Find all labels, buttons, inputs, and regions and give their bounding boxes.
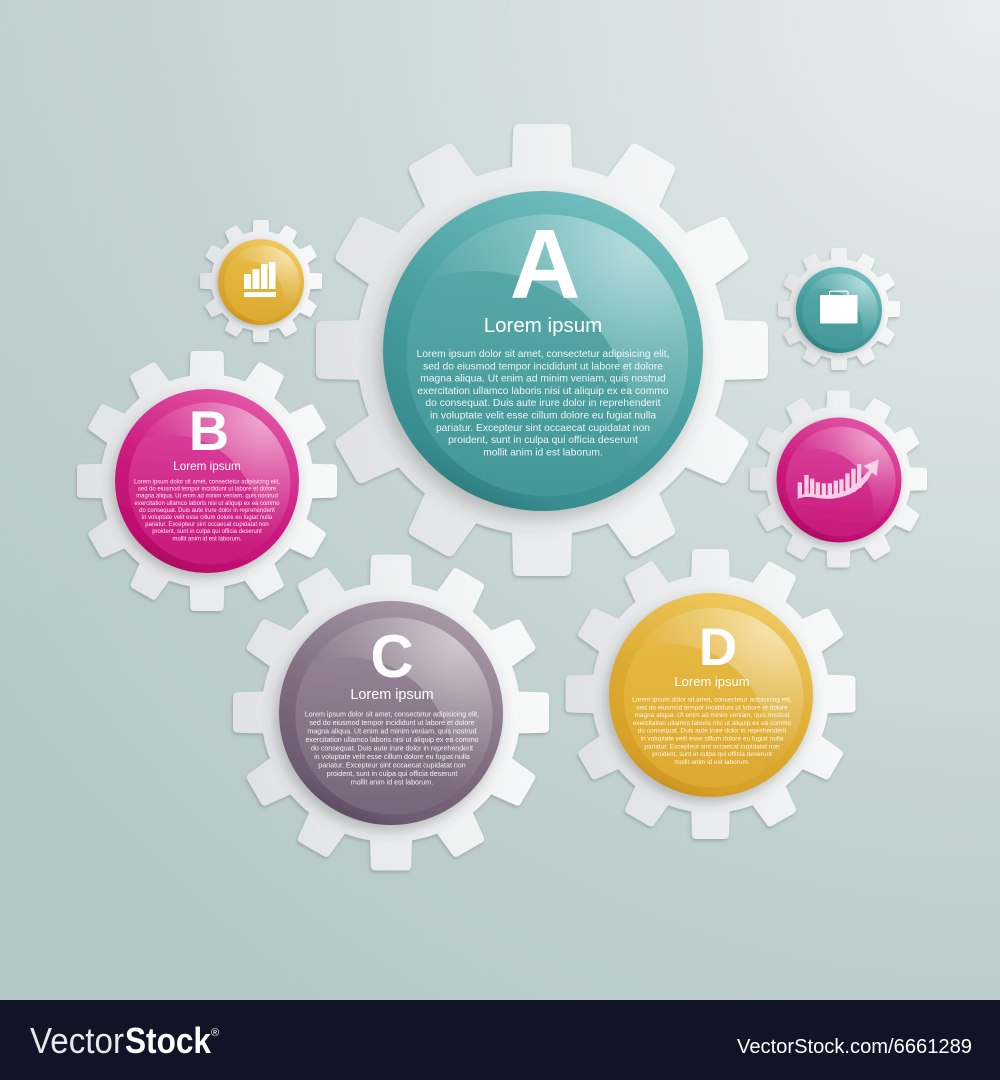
panel: gear A bbox=[311, 119, 773, 581]
body text C: in voluptate velit esse cillum dolore eu fugiat nulla bbox=[314, 753, 470, 761]
heading B: Lorem ipsum bbox=[173, 460, 241, 473]
gear shape bbox=[74, 348, 340, 614]
yellow button bbox=[214, 238, 306, 330]
body text D: magna aliqua. Ut enim ad minim veniam, quis nostrud bbox=[634, 712, 790, 719]
body text C: mollit anim id est laborum. bbox=[351, 778, 433, 786]
body text D: in voluptate velit esse cillum dolore eu fugiat nulla bbox=[641, 736, 784, 742]
footer logo: Vector bbox=[30, 1020, 124, 1061]
heading D: Lorem ipsum bbox=[674, 674, 750, 689]
teal button bbox=[368, 188, 710, 530]
body text C bbox=[305, 710, 479, 786]
footer bar bbox=[0, 1000, 1000, 1080]
panel: gear D bbox=[563, 546, 858, 842]
pink button bbox=[770, 416, 904, 550]
body text A: proident, sunt in culpa qui officia deserunt bbox=[448, 435, 638, 446]
purple button bbox=[268, 599, 508, 838]
body text D: exercitation ullamco laboris nisi ut aliquip ex ea commo bbox=[633, 720, 792, 727]
body text A: in voluptate velit esse cillum dolore eu fugiat nulla bbox=[430, 410, 656, 422]
teal button bbox=[792, 266, 884, 358]
heading A: Lorem ipsum bbox=[484, 314, 602, 337]
body text B: exercitation ullamco laboris nisi ut aliquip ex ea commo bbox=[135, 501, 280, 507]
small gear: bar chart bbox=[199, 219, 323, 343]
body text B: proident, sunt in culpa qui officia deserunt bbox=[152, 529, 262, 535]
body text A: pariatur. Excepteur sint occaecat cupidatat non bbox=[436, 423, 650, 434]
body text B: mollit anim id est laborum. bbox=[173, 536, 242, 542]
gear shape bbox=[311, 119, 773, 581]
body text D: sed do eiusmod tempor incididunt ut labore et dolore bbox=[636, 704, 788, 711]
body text B bbox=[134, 480, 280, 542]
yellow button bbox=[599, 591, 817, 809]
panel: gear C bbox=[230, 551, 552, 874]
panel: gear B bbox=[74, 348, 340, 614]
body text A: do consequat. Duis aute irure dolor in reprehenderit bbox=[425, 398, 661, 409]
heading C: Lorem ipsum bbox=[350, 687, 434, 703]
body text B: magna aliqua. Ut enim ad minim veniam, quis nostrud bbox=[136, 494, 278, 500]
letter B: B bbox=[189, 399, 229, 462]
footer logo bbox=[30, 1020, 219, 1061]
body text B: Lorem ipsum dolor sit amet, consectetur adipisicing elit, bbox=[134, 480, 280, 486]
body text D: proident, sunt in culpa qui officia deserunt bbox=[652, 751, 772, 758]
body text D: pariatur. Excepteur sint occaecat cupidatat non bbox=[644, 743, 780, 750]
body text C: proident, sunt in culpa qui officia deserunt bbox=[327, 770, 457, 778]
body text C: pariatur. Excepteur sint occaecat cupidatat non bbox=[318, 762, 466, 770]
gear shape bbox=[199, 219, 323, 343]
body text D bbox=[632, 696, 792, 766]
small gear: growth chart bbox=[748, 389, 929, 569]
footer logo: ® bbox=[211, 1027, 219, 1039]
body text D: Lorem ipsum dolor sit amet, consectetur adipisicing elit, bbox=[632, 696, 792, 704]
gear shape bbox=[777, 247, 901, 371]
icon: briefcase bbox=[820, 291, 858, 324]
gear shape bbox=[563, 546, 858, 842]
body text A: mollit anim id est laborum. bbox=[483, 447, 603, 458]
icon: rising bars with arrow bbox=[797, 459, 879, 499]
pink button bbox=[106, 388, 303, 584]
body text C: exercitation ullamco laboris nisi ut aliquip ex ea commo bbox=[305, 736, 479, 744]
letter D: D bbox=[699, 618, 737, 677]
body text D: do consequat. Duis aute irure dolor in reprehenderit bbox=[638, 728, 786, 735]
gear shape bbox=[230, 551, 552, 874]
body text A bbox=[417, 349, 669, 458]
body text B: sed do eiusmod tempor incididunt ut labore et dolore bbox=[138, 487, 277, 493]
small gear: briefcase bbox=[777, 247, 901, 371]
letter C: C bbox=[370, 623, 414, 690]
body text D: mollit anim id est laborum. bbox=[674, 759, 750, 766]
letter A: A bbox=[510, 209, 580, 319]
body text A: sed do eiusmod tempor incididunt ut labore et dolore bbox=[423, 361, 663, 372]
body text B: pariatur. Excepteur sint occaecat cupidatat non bbox=[145, 522, 269, 528]
footer logo: Stock bbox=[125, 1020, 212, 1061]
body text B: do consequat. Duis aute irure dolor in reprehenderit bbox=[139, 508, 275, 514]
body text C: magna aliqua. Ut enim ad minim veniam, quis nostrud bbox=[307, 728, 477, 736]
body text A: magna aliqua. Ut enim ad minim veniam, quis nostrud bbox=[420, 374, 666, 385]
icon: bar chart bbox=[244, 262, 276, 297]
body text C: Lorem ipsum dolor sit amet, consectetur adipisicing elit, bbox=[305, 710, 479, 718]
body text A: exercitation ullamco laboris nisi ut aliquip ex ea commo bbox=[417, 386, 669, 397]
body text B: in voluptate velit esse cillum dolore eu fugiat nulla bbox=[142, 515, 273, 521]
body text A: Lorem ipsum dolor sit amet, consectetur adipisicing elit, bbox=[417, 349, 669, 360]
footer url: VectorStock.com/6661289 bbox=[737, 1036, 972, 1058]
gear shape bbox=[748, 389, 929, 569]
body text C: do consequat. Duis aute irure dolor in reprehenderit bbox=[311, 744, 473, 752]
body text C: sed do eiusmod tempor incididunt ut labore et dolore bbox=[309, 719, 475, 727]
